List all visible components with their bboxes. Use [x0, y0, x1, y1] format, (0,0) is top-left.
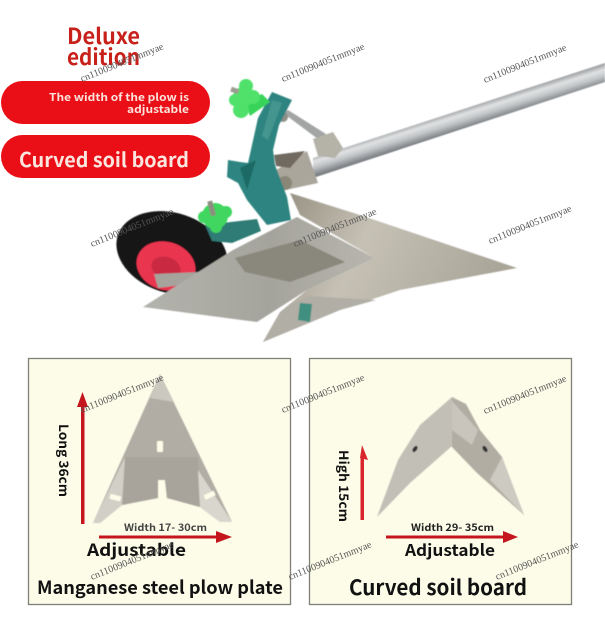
label: adjustable: Adjustable — [86, 536, 186, 561]
label: long 36cm: Long 36cm — [55, 424, 74, 497]
label: high 15cm: High 15cm — [335, 450, 354, 522]
watermarks: cn1100904051mmyae — [89, 539, 176, 583]
label: width range: Width 29- 35cm — [411, 519, 494, 534]
arrow: width — [386, 531, 518, 543]
wheel arm — [205, 219, 261, 243]
arrow: height — [360, 445, 368, 520]
caption: manganese steel plow plate: Manganese steel plow plate — [37, 574, 283, 600]
watermarks: cn1100904051mmyae — [292, 206, 379, 250]
watermarks: cn1100904051mmyae — [487, 203, 574, 247]
badge: curved soil board — [1, 135, 210, 178]
knob: lower green — [198, 200, 232, 233]
label: adjustable: Adjustable — [404, 537, 495, 561]
arrow: length — [77, 392, 88, 524]
badge: plow width adjustable — [1, 81, 210, 124]
panel: manganese steel plow plate — [28, 358, 290, 604]
caption: curved soil board: Curved soil board — [349, 572, 527, 602]
badge: plow width adjustable: adjustable — [127, 102, 189, 117]
adjustment rod — [283, 110, 326, 142]
watermarks: cn1100904051mmyae — [494, 539, 581, 583]
watermarks: cn1100904051mmyae — [79, 41, 166, 85]
watermarks — [79, 41, 581, 583]
label: width range: Width 17- 30cm — [124, 519, 207, 534]
title: Deluxe edition — [67, 19, 140, 72]
watermarks: cn1100904051mmyae — [280, 372, 367, 416]
arrow: width — [99, 531, 232, 543]
plow plate image — [93, 374, 232, 523]
handle pole — [313, 63, 605, 178]
teal bracket — [227, 92, 292, 225]
watermarks: cn1100904051mmyae — [287, 539, 374, 583]
product photo: plow with wheel and handle — [105, 63, 605, 342]
watermarks: cn1100904051mmyae — [89, 206, 176, 250]
title: Deluxe edition: edition — [67, 40, 140, 72]
pole clamp — [313, 132, 343, 158]
title: Deluxe edition: Deluxe — [67, 19, 140, 51]
badge: curved soil board: Curved soil board — [19, 144, 189, 173]
watermarks: cn1100904051mmyae — [79, 372, 166, 416]
watermarks: cn1100904051mmyae — [482, 42, 569, 86]
watermarks: cn1100904051mmyae — [280, 41, 367, 85]
badge: plow width adjustable: The width of the plow is — [49, 90, 189, 105]
wheel — [105, 197, 239, 309]
curved board image — [377, 397, 524, 517]
watermarks: cn1100904051mmyae — [482, 373, 569, 417]
front blade — [143, 217, 375, 322]
rear blade — [263, 193, 517, 342]
knob: upper green — [229, 79, 270, 118]
panel: curved soil board — [310, 358, 572, 604]
